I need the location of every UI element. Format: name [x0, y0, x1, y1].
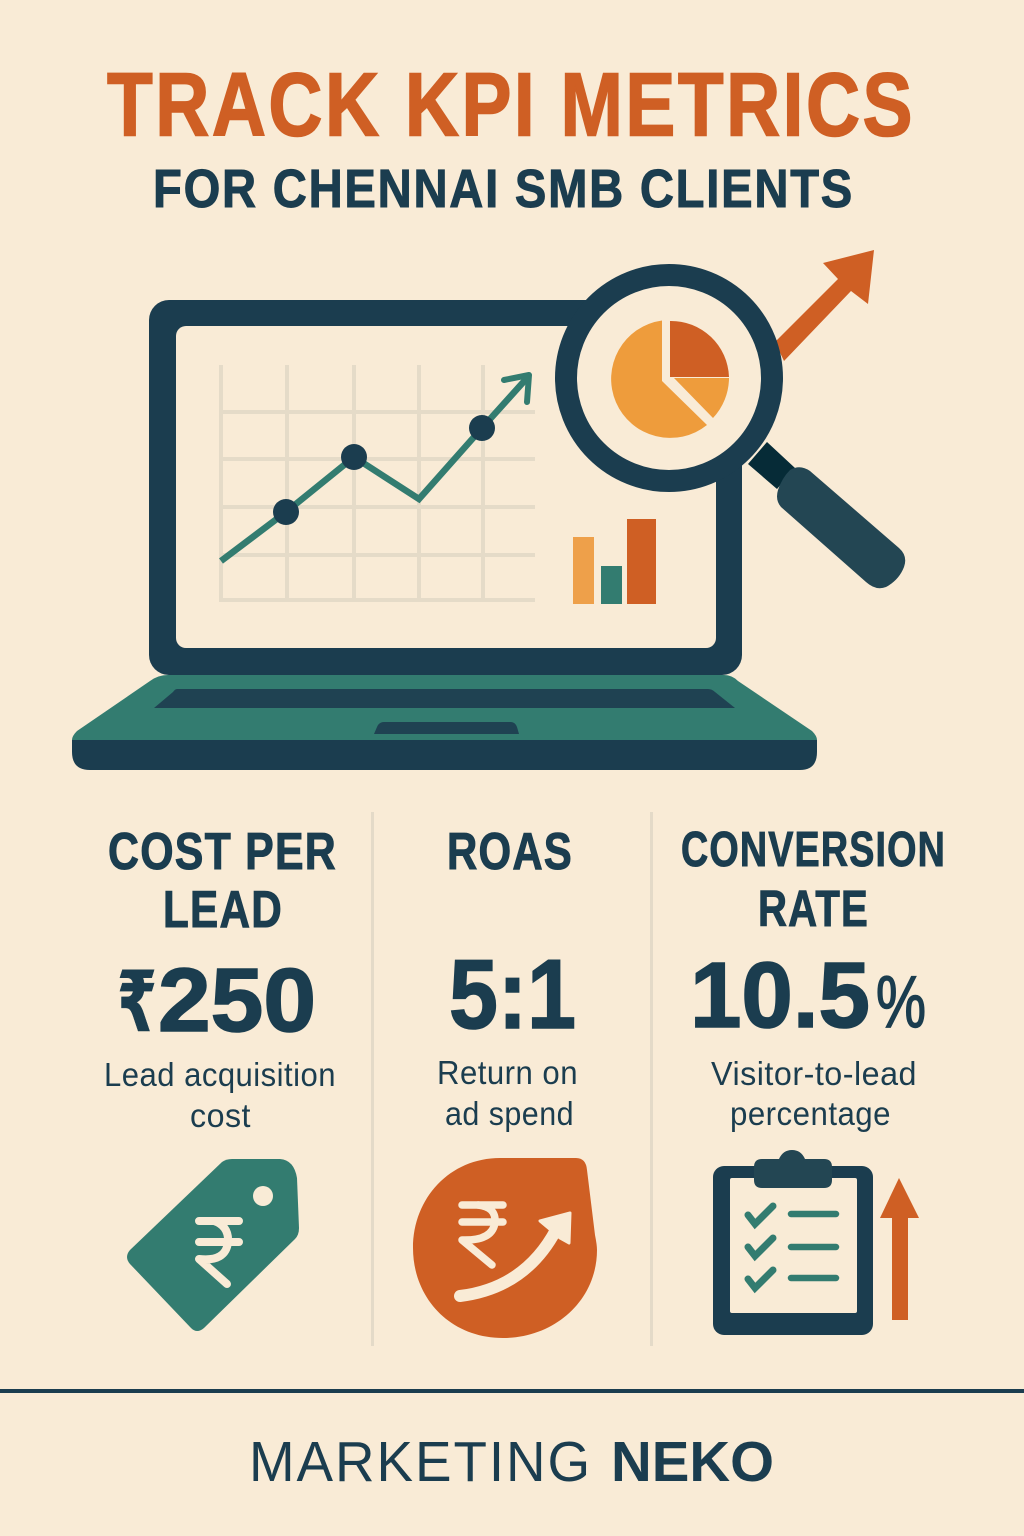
description: percentage [730, 1095, 891, 1132]
title: FOR CHENNAI SMB CLIENTS [153, 159, 854, 219]
panel: roas [413, 823, 597, 1338]
value: 10.5 percent: % [876, 962, 926, 1043]
illustration: laptop with chart and magnifying glass [72, 250, 905, 770]
pie chart [611, 320, 729, 438]
magnifying glass [566, 275, 905, 588]
column dividers [371, 812, 653, 1346]
description [104, 1056, 336, 1134]
heading: cost per lead: COST PER [108, 823, 337, 881]
heading: conversion rate: CONVERSION [681, 823, 946, 877]
icon: rupee growth [413, 1158, 597, 1338]
line chart [221, 365, 535, 602]
heading: cost per lead: LEAD [163, 881, 283, 939]
description: ad spend [445, 1095, 574, 1132]
heading: cost per lead [108, 823, 337, 939]
value: 250 rupees: ₹ [117, 955, 157, 1049]
panel: conversion rate [681, 823, 946, 1335]
laptop screen [176, 326, 716, 648]
value: 250 rupees: 250 [158, 951, 316, 1051]
icon: clipboard checklist [713, 1150, 873, 1335]
description [711, 1055, 917, 1132]
laptop base [72, 675, 817, 770]
value: 10.5 percent: 10.5 [690, 943, 870, 1047]
bar chart [573, 519, 656, 604]
description: Visitor-to-lead [711, 1055, 917, 1092]
footer rule [0, 1389, 1024, 1393]
panel: cost per lead [104, 823, 337, 1331]
icon: price tag [127, 1159, 299, 1331]
description [437, 1054, 578, 1132]
footer brand: NEKO [611, 1430, 774, 1494]
description: Return on [437, 1054, 578, 1091]
title [107, 56, 915, 219]
icon: up arrow [880, 1178, 919, 1320]
heading: conversion rate: RATE [758, 880, 869, 937]
icon: growth arrow [775, 250, 874, 361]
footer brand [249, 1430, 774, 1494]
footer brand: MARKETING [249, 1430, 592, 1494]
description: cost [190, 1097, 251, 1134]
description: Lead acquisition [104, 1056, 336, 1093]
heading: conversion rate [681, 823, 946, 937]
heading: roas: ROAS [447, 823, 573, 881]
laptop screen frame [149, 300, 742, 675]
value: 5 to 1: 5:1 [449, 939, 576, 1049]
